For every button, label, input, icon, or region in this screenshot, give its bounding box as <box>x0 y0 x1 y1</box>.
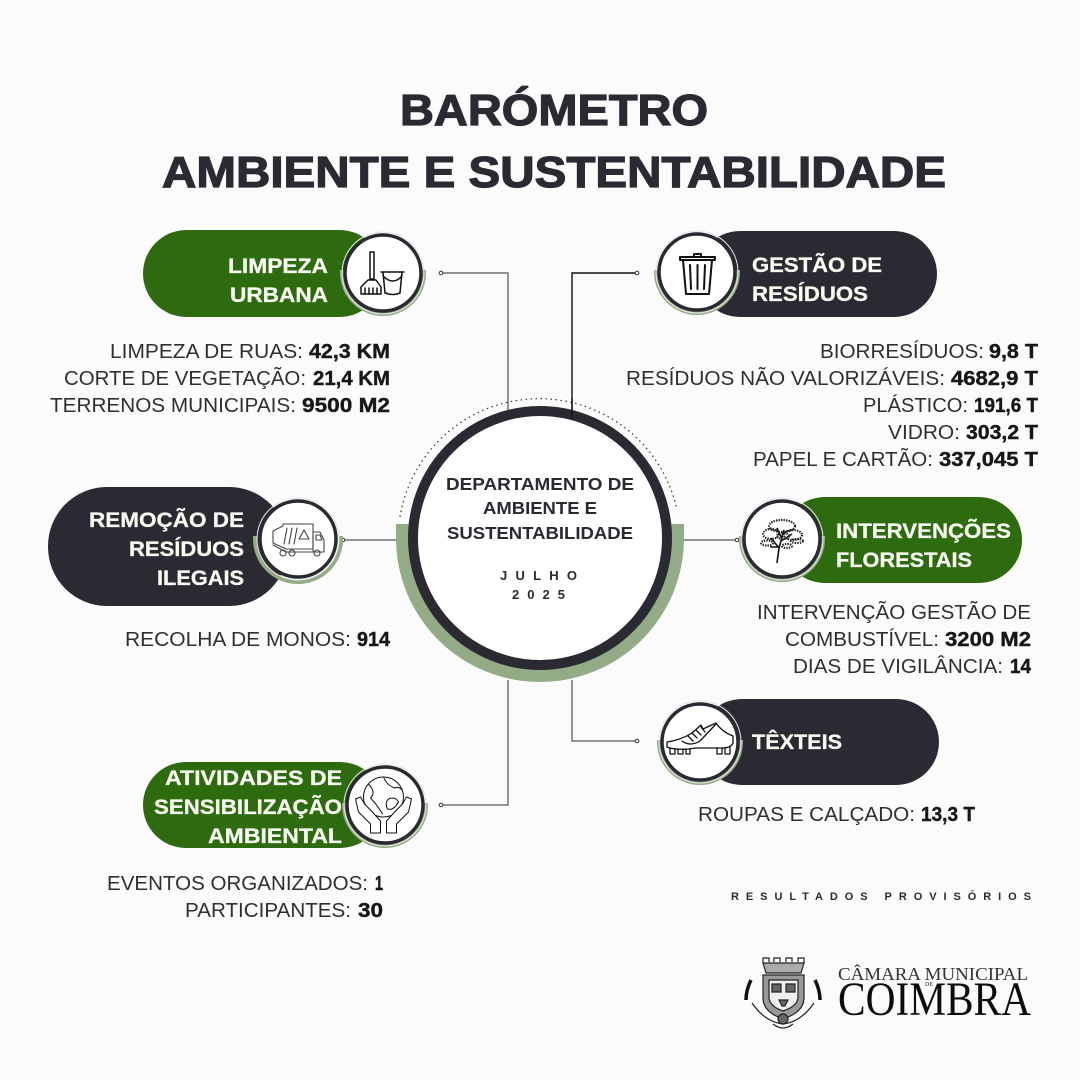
logo: câmara municipal de coimbra: CÂMARA MUNICIPAL <box>838 963 1028 984</box>
data list: 13,3 T <box>921 804 975 826</box>
data list: 42,3 KM <box>309 341 390 363</box>
data list: CORTE DE VEGETAÇÃO: <box>64 366 306 390</box>
data list: INTERVENÇÃO GESTÃO DE <box>757 600 1031 624</box>
icon: trash can <box>680 254 715 294</box>
heading <box>228 254 328 307</box>
central date: JULHO <box>500 568 577 583</box>
data list: 3200 M2 <box>945 629 1031 651</box>
footnote: RESULTADOS PROVISÓRIOS <box>731 890 1031 903</box>
data list: 21,4 KM <box>313 368 390 390</box>
heading <box>89 507 244 590</box>
heading <box>836 518 1011 572</box>
data list: PAPEL E CARTÃO: <box>753 447 933 471</box>
title: BARÓMETRO <box>400 85 708 135</box>
panel: limpeza urbana <box>50 230 424 417</box>
central heading: SUSTENTABILIDADE <box>447 523 633 543</box>
data list: 9500 M2 <box>302 395 390 417</box>
data list <box>626 340 1038 471</box>
data list: ROUPAS E CALÇADO: <box>698 804 915 826</box>
data list: PLÁSTICO: <box>863 394 968 417</box>
heading: LIMPEZA <box>228 254 328 278</box>
data list: RECOLHA DE MONOS: <box>125 629 351 651</box>
logo: câmara municipal de coimbra <box>746 958 1031 1028</box>
heading: TÊXTEIS <box>752 729 842 754</box>
heading: GESTÃO DE <box>752 252 882 277</box>
data list: COMBUSTÍVEL: <box>785 628 939 651</box>
data list: 191,6 T <box>974 395 1038 417</box>
icon: recycling truck <box>273 524 324 556</box>
heading: RESÍDUOS <box>752 281 868 306</box>
heading: ATIVIDADES DE <box>165 766 342 790</box>
heading: REMOÇÃO DE <box>89 507 244 532</box>
central heading <box>446 474 634 543</box>
icon: hands holding globe <box>356 777 412 833</box>
panel: têxteis <box>659 699 975 826</box>
heading: AMBIENTAL <box>208 824 342 848</box>
data list <box>757 600 1032 678</box>
data list: 337,045 T <box>939 449 1038 471</box>
icon: football boot <box>667 723 733 754</box>
data list: EVENTOS ORGANIZADOS: <box>107 873 368 895</box>
data list: DIAS DE VIGILÂNCIA: <box>793 655 1003 678</box>
data list: 303,2 T <box>966 422 1038 444</box>
data list: TERRENOS MUNICIPAIS: <box>50 395 296 417</box>
connector lines <box>341 271 739 807</box>
data list: 9,8 T <box>989 341 1038 363</box>
data list: 4682,9 T <box>951 368 1038 390</box>
data list: BIORRESÍDUOS: <box>820 340 984 363</box>
panel: intervenções florestais <box>741 497 1032 678</box>
central heading: AMBIENTE E <box>483 498 597 518</box>
heading <box>154 766 342 848</box>
title <box>162 85 946 197</box>
logo: câmara municipal de coimbra: COIMBRA <box>838 973 1031 1026</box>
central heading: DEPARTAMENTO DE <box>446 474 634 494</box>
data list: 30 <box>358 900 383 922</box>
heading: INTERVENÇÕES <box>836 518 1011 543</box>
data list: VIDRO: <box>888 422 960 444</box>
panel: gestão de resíduos <box>626 231 1038 471</box>
data list: PARTICIPANTES: <box>185 900 351 922</box>
panel: remoção de resíduos ilegais <box>48 487 391 651</box>
data list: 1 <box>375 873 383 895</box>
heading <box>752 252 882 306</box>
heading: SENSIBILIZAÇÃO <box>154 794 342 819</box>
data list: LIMPEZA DE RUAS: <box>110 341 303 363</box>
icon: tree <box>761 520 803 563</box>
central circle <box>396 398 684 682</box>
icon: broom and bucket <box>361 252 404 294</box>
data list: RESÍDUOS NÃO VALORIZÁVEIS: <box>626 366 945 390</box>
central date: 2025 <box>512 587 565 602</box>
data list: 914 <box>357 629 391 651</box>
data list: 14 <box>1010 656 1032 678</box>
heading: RESÍDUOS <box>129 536 244 561</box>
logo: câmara municipal de coimbra: DE <box>925 982 933 988</box>
panel: atividades de sensibilização ambiental <box>107 762 426 922</box>
heading: ILEGAIS <box>157 566 244 590</box>
heading: URBANA <box>230 283 328 307</box>
heading: FLORESTAIS <box>836 548 972 572</box>
central date <box>500 568 577 602</box>
icon: coat of arms <box>746 958 820 1028</box>
data list <box>50 341 390 417</box>
title: AMBIENTE E SUSTENTABILIDADE <box>162 148 946 197</box>
data list <box>107 873 383 922</box>
